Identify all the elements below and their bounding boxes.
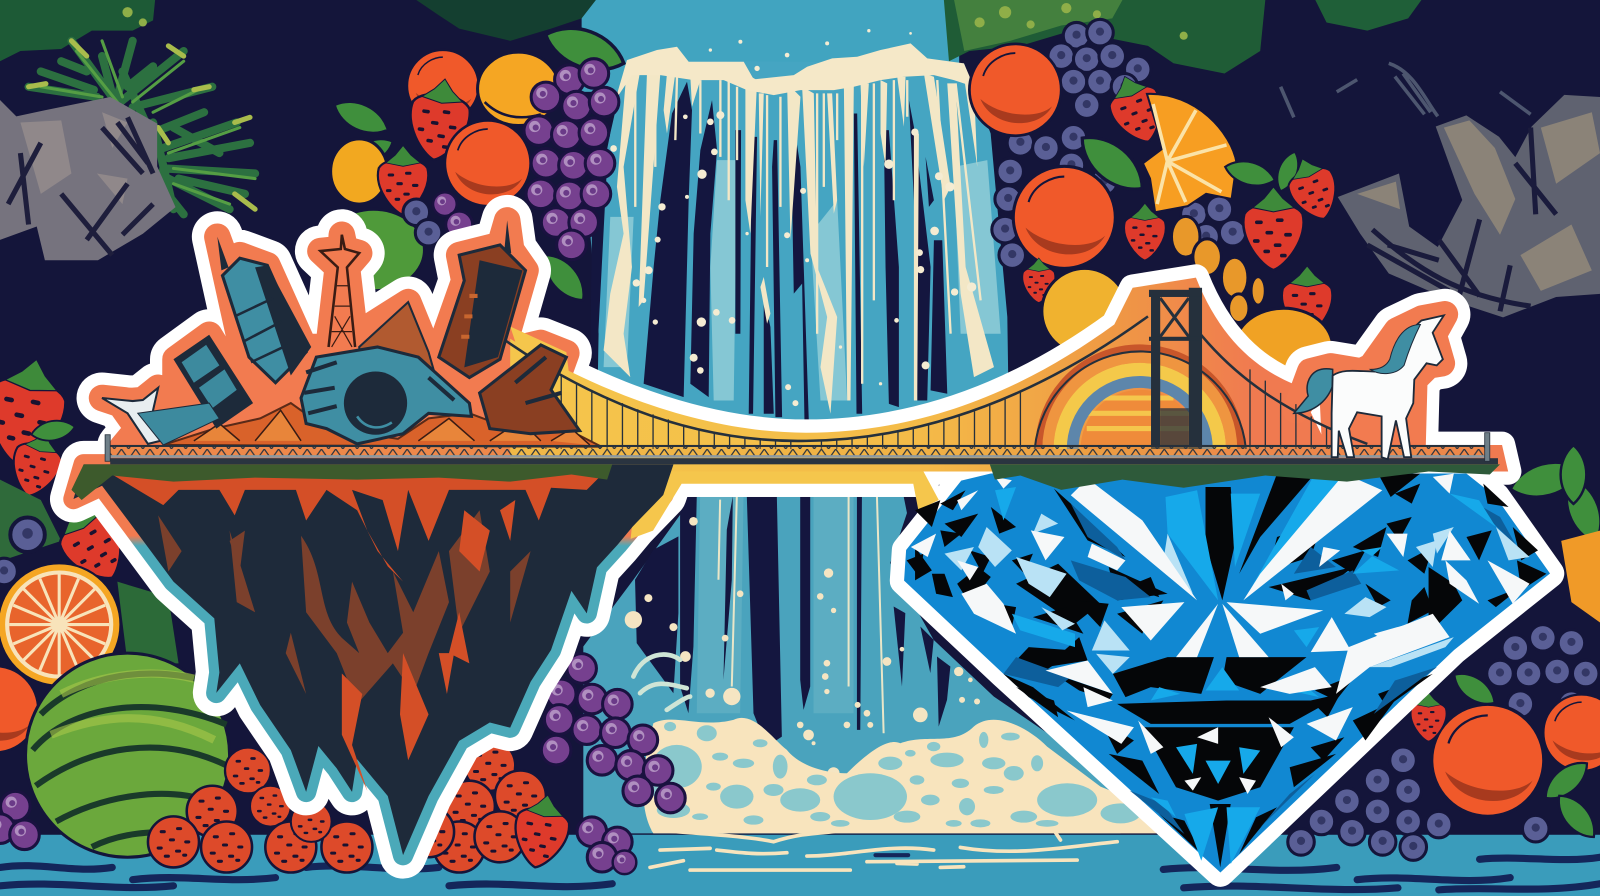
brown tower (504, 220, 511, 253)
fruit pile: right side (1288, 445, 1600, 860)
right debris (480, 345, 580, 434)
bridge: hangers and cables (500, 316, 1367, 449)
foam: cream waves on water (650, 830, 1117, 870)
diamond: white facets (911, 474, 1530, 794)
waterfall: lighter sheets (604, 160, 1001, 400)
waterfall: spray dots (607, 29, 976, 406)
foliage: top canopy (0, 0, 1421, 73)
plane wreck (102, 388, 168, 444)
waterfall: lower spray dots (625, 517, 980, 779)
citrus slice: grapefruit (0, 563, 120, 686)
rock: right outcrop (1281, 63, 1600, 317)
lattice tower (320, 235, 359, 347)
waterfall: fine cream threads (635, 77, 981, 384)
waterfall: cream crest (615, 43, 974, 100)
waterfall: lower dark streaks (635, 496, 950, 747)
swirl: splash curl (633, 655, 690, 710)
fruit pile: left side (0, 351, 230, 857)
sticker: white die-cut outline (73, 220, 1550, 873)
sticker: coloured inner band (73, 220, 1508, 855)
diamond: bright cyan facets (995, 474, 1496, 864)
melon: behind island (322, 209, 424, 291)
foliage: fern (29, 41, 255, 214)
lemon: left (331, 139, 388, 204)
foam: aqua pockets (652, 722, 1141, 827)
waterfall: lower pale lines (718, 496, 884, 733)
island: brown roots (158, 510, 531, 704)
lemon: behind bridge (1042, 268, 1128, 354)
water: dark wave lines (0, 855, 1600, 890)
unicorn: body (1332, 315, 1444, 459)
yellow band under deck (631, 471, 939, 539)
island: floating rock body (71, 464, 673, 855)
end post: left (105, 435, 110, 461)
cylinder tower (217, 237, 229, 270)
fruit pile: bottom left berries and grapes (148, 654, 685, 874)
waterfall: cream streaks (604, 67, 994, 414)
diamond: pale blue facets (945, 514, 1530, 674)
waterfall: upper body (590, 29, 1009, 430)
crumpled roofs (359, 302, 439, 388)
city rubble on island (102, 220, 602, 447)
waterfall: lower body (583, 496, 1121, 833)
diamond: black facets (907, 474, 1546, 867)
bridge tower (1149, 288, 1202, 449)
end post: right (1485, 433, 1490, 461)
unicorn: tail (1294, 369, 1333, 413)
island: red lava streaks (112, 475, 602, 791)
rubble: orange pile (163, 403, 602, 447)
grass under right deck (990, 464, 1500, 490)
unicorn (1294, 315, 1444, 459)
rainbow arch (1035, 348, 1246, 449)
rock: left outcrop (0, 97, 176, 260)
diamond: deep blue facets (1003, 500, 1517, 834)
water: pool (0, 835, 1600, 896)
yellow orange: top (478, 52, 559, 126)
diamond (904, 474, 1550, 873)
unicorn: mane (1370, 325, 1420, 374)
foam: splash at waterfall base (643, 718, 1167, 870)
bridge deck: truss and roadway (105, 433, 1500, 490)
island: grassy top edge (71, 464, 612, 500)
orange: behind unicorn (1235, 308, 1333, 386)
fruit pile: upper right (969, 19, 1346, 386)
fruit pile: upper left (322, 18, 630, 308)
sky opening above waterfall (582, 0, 959, 92)
tilted dark block (173, 335, 253, 429)
rock: faint upper hatching (1281, 63, 1531, 117)
waterfall: dark streaks (590, 82, 947, 420)
citrus slice (1143, 94, 1237, 212)
melon: large (26, 653, 230, 857)
teal wreck with lens (301, 347, 471, 444)
